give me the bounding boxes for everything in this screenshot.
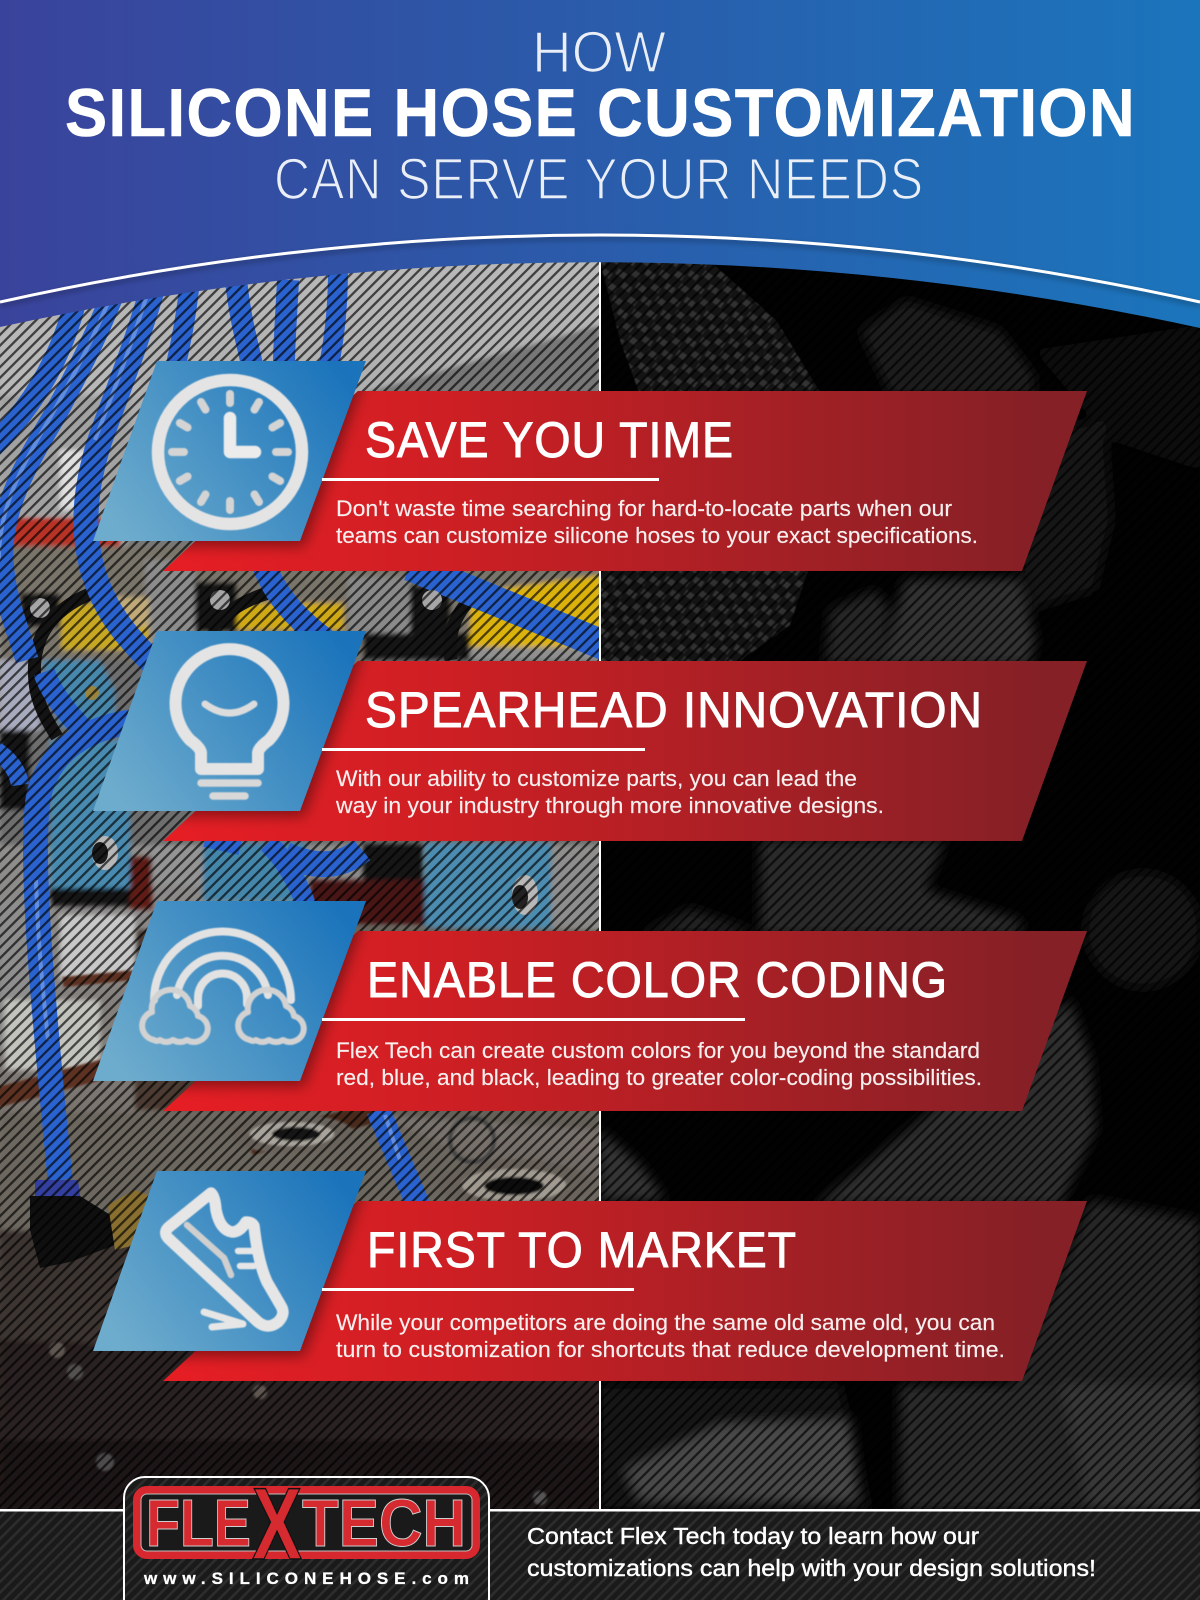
body text: turn to customization for shortcuts that reduce development time. — [336, 1337, 1005, 1362]
blue icon tile — [93, 901, 366, 1081]
elbow fitting — [30, 1180, 148, 1268]
body text: With our ability to customize parts, you can lead the — [336, 766, 857, 791]
panel: spearhead innovation — [93, 631, 1087, 841]
panel: first to market — [93, 1171, 1087, 1381]
logo badge — [124, 1467, 489, 1600]
body text: way in your industry through more innovative designs. — [335, 793, 884, 818]
icon: light bulb — [176, 649, 284, 796]
red banner — [163, 391, 1087, 571]
blue icon tile — [93, 1171, 366, 1351]
blue hoses — [0, 270, 606, 1205]
title line 2: SILICONE HOSE CUSTOMIZATION — [65, 75, 1136, 151]
title line 1: HOW — [532, 20, 666, 85]
body text: While your competitors are doing the same old same old, you can — [336, 1310, 995, 1335]
logo wordmark — [146, 1467, 466, 1581]
hose highlights — [0, 285, 400, 1160]
body text — [336, 1310, 1005, 1362]
logo frame — [137, 1490, 476, 1555]
braided sleeve — [600, 262, 822, 665]
divider — [322, 1018, 745, 1021]
red banner — [163, 661, 1087, 841]
black cables — [34, 593, 467, 737]
call to action — [527, 1523, 1096, 1581]
divider — [322, 478, 659, 481]
body text — [336, 496, 978, 548]
call to action: customizations can help with your design solutions! — [527, 1555, 1096, 1581]
logo wordmark: X — [252, 1467, 302, 1581]
background: left machinery photo — [0, 230, 606, 1510]
red banner — [163, 1201, 1087, 1381]
heading: ENABLE COLOR CODING — [367, 952, 948, 1008]
heading: SPEARHEAD INNOVATION — [365, 682, 983, 738]
panel: enable color coding — [93, 901, 1087, 1111]
metal rings — [49, 1114, 590, 1505]
red banner — [163, 931, 1087, 1111]
header band — [0, 0, 1200, 328]
divider — [322, 1288, 634, 1291]
logo wordmark: TECH — [302, 1486, 466, 1561]
logo wordmark: FLE — [146, 1486, 251, 1561]
body text — [335, 766, 884, 818]
title — [65, 20, 1136, 212]
icon: rainbow and clouds — [142, 932, 304, 1042]
body text: teams can customize silicone hoses to your exact specifications. — [336, 523, 978, 548]
gauge discs — [30, 590, 538, 915]
body text: Flex Tech can create custom colors for you beyond the standard — [336, 1038, 980, 1063]
body text: red, blue, and black, leading to greater color-coding possibilities. — [336, 1065, 982, 1090]
body text: Don't waste time searching for hard-to-locate parts when our — [336, 496, 953, 521]
icon: clock — [158, 380, 302, 524]
footer band — [0, 1509, 1200, 1600]
background: right dark hose photo — [600, 230, 1200, 1510]
centre divider — [599, 255, 601, 1510]
brown pipe — [0, 975, 385, 1145]
heading: SAVE YOU TIME — [365, 412, 734, 468]
title line 3: CAN SERVE YOUR NEEDS — [274, 147, 924, 212]
divider — [322, 748, 645, 751]
blue icon tile — [93, 631, 366, 811]
panel: save you time — [93, 361, 1087, 571]
blue icon tile — [93, 361, 366, 541]
heading: FIRST TO MARKET — [367, 1222, 797, 1278]
body text — [336, 1038, 982, 1090]
logo url: www.SILICONEHOSE.com — [143, 1569, 469, 1588]
icon: running shoe — [166, 1193, 283, 1327]
call to action: Contact Flex Tech today to learn how our — [527, 1523, 979, 1549]
